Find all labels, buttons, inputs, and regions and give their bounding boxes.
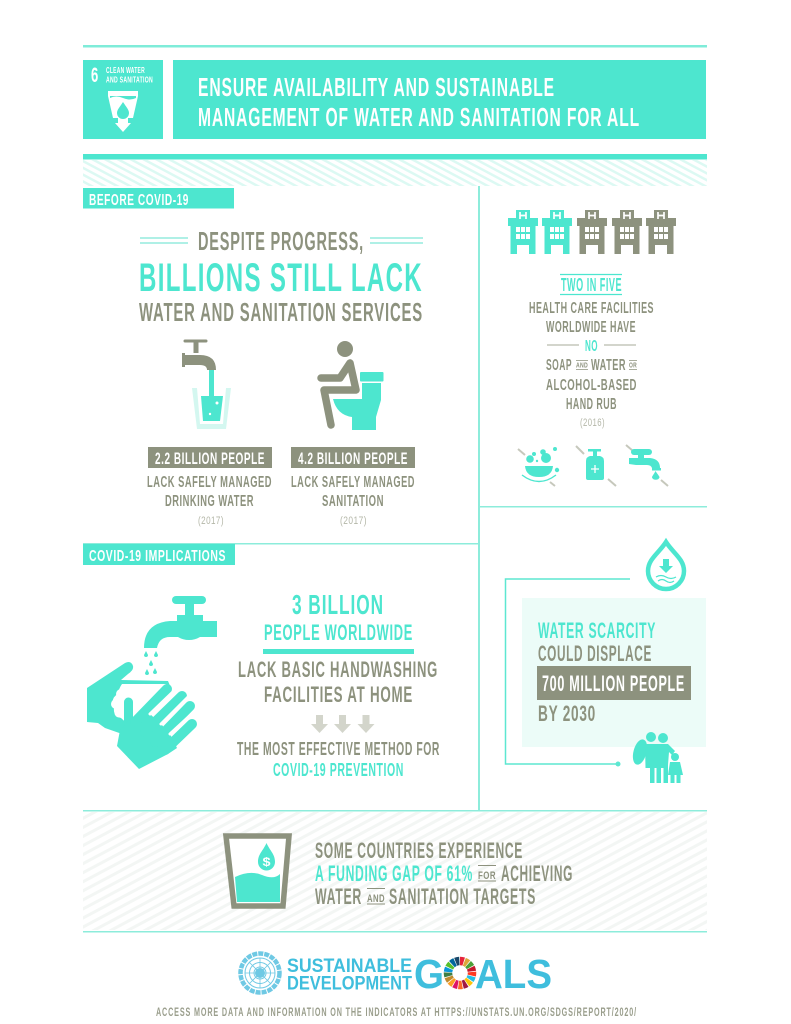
text: funding gap: SANITATION TARGETS bbox=[389, 884, 536, 909]
logo: sustainable development goals: DEVELOPMENT bbox=[287, 974, 412, 994]
text: two in five health care facilities: HAND RUB bbox=[566, 396, 617, 413]
stat: 4.2 billion: LACK SAFELY MANAGED bbox=[291, 474, 415, 491]
icons: crossed out soap, sanitizer and tap bbox=[518, 445, 668, 486]
logo: sustainable development goals: G bbox=[414, 951, 444, 997]
logo: sustainable development goals: SUSTAINABLE bbox=[287, 956, 412, 977]
text: 3 billion lack handwashing: THE MOST EFFECTIVE METHOD FOR bbox=[237, 739, 440, 759]
stat: 2.2 billion bbox=[147, 447, 272, 527]
sdg 6 badge: 6 bbox=[91, 64, 99, 87]
text: funding gap: A FUNDING GAP OF 61% bbox=[315, 861, 473, 886]
panel: water scarcity: BY 2030 bbox=[538, 701, 596, 726]
sdg 6 badge: AND SANITATION bbox=[106, 76, 153, 84]
heading: billions still lack: WATER AND SANITATION SERVICES bbox=[139, 297, 423, 327]
text: funding gap bbox=[315, 838, 573, 909]
text: two in five health care facilities: (2016) bbox=[580, 417, 605, 429]
heading: billions still lack: DESPITE PROGRESS, bbox=[198, 226, 364, 256]
heading: billions still lack: BILLIONS STILL LACK bbox=[139, 256, 423, 300]
icon: glass with dollar drop bbox=[226, 836, 289, 906]
icon: person on toilet bbox=[321, 341, 384, 430]
panel: water scarcity: COULD DISPLACE bbox=[538, 641, 652, 666]
stat: 4.2 billion: (2017) bbox=[340, 515, 367, 527]
stat: 2.2 billion: LACK SAFELY MANAGED bbox=[147, 474, 272, 491]
text: funding gap: FOR bbox=[478, 870, 496, 882]
icon: water drop with arrow bbox=[648, 542, 684, 589]
text: funding gap: SOME COUNTRIES EXPERIENCE bbox=[315, 838, 523, 863]
text: two in five health care facilities: SOAP bbox=[546, 357, 572, 374]
text: two in five health care facilities: WORLDWIDE HAVE bbox=[546, 319, 636, 336]
text: 3 billion lack handwashing: 3 BILLION bbox=[292, 589, 384, 620]
text: funding gap: AND bbox=[367, 893, 385, 905]
text: two in five health care facilities: AND bbox=[576, 362, 588, 370]
text: two in five health care facilities: WATER bbox=[591, 357, 626, 374]
text: two in five health care facilities: TWO IN FIVE bbox=[561, 275, 622, 295]
text: funding gap: ACHIEVING bbox=[501, 861, 573, 886]
icon: washing hands under tap bbox=[87, 596, 217, 769]
sdg 6 badge bbox=[83, 60, 163, 139]
text: funding gap: WATER bbox=[315, 884, 362, 909]
text: two in five health care facilities: NO bbox=[585, 338, 598, 355]
stat: 2.2 billion: DRINKING WATER bbox=[165, 493, 254, 510]
text: two in five health care facilities: ALCOHOL-BASED bbox=[546, 377, 637, 394]
stat: 2.2 billion: 2.2 BILLION PEOPLE bbox=[155, 449, 265, 468]
heading: billions still lack bbox=[139, 226, 423, 327]
text: two in five health care facilities: OR bbox=[629, 362, 637, 370]
text: 3 billion lack handwashing: COVID-19 PREVENTION bbox=[273, 760, 404, 780]
panel: water scarcity bbox=[522, 598, 706, 747]
text: two in five health care facilities: HEALTH CARE FACILITIES bbox=[529, 300, 654, 317]
text: 3 billion lack handwashing bbox=[237, 589, 440, 780]
stat: 4.2 billion: 4.2 BILLION PEOPLE bbox=[298, 449, 408, 468]
text: 3 billion lack handwashing: LACK BASIC HANDWASHING bbox=[238, 657, 438, 682]
icon: family bbox=[630, 732, 683, 783]
logo: sustainable development goals: ALS bbox=[475, 951, 552, 997]
sdg 6 badge: CLEAN WATER bbox=[106, 66, 145, 75]
icon: glass with dollar drop: $ bbox=[262, 855, 271, 869]
logo: sustainable development goals bbox=[287, 951, 552, 997]
text: 3 billion lack handwashing: PEOPLE WORLDWIDE bbox=[264, 620, 413, 645]
text: two in five health care facilities bbox=[529, 274, 654, 429]
panel: water scarcity: 700 MILLION PEOPLE bbox=[542, 671, 685, 696]
title banner bbox=[173, 60, 706, 139]
stat: 2.2 billion: (2017) bbox=[198, 515, 224, 527]
connector line bbox=[506, 579, 630, 764]
logo: united nations emblem bbox=[240, 954, 280, 992]
section tag: before covid-19: BEFORE COVID-19 bbox=[89, 192, 189, 209]
section tag: covid-19 implications: COVID-19 IMPLICATIONS bbox=[89, 548, 226, 565]
stat: 4.2 billion bbox=[291, 447, 415, 527]
stat: 4.2 billion: SANITATION bbox=[322, 493, 384, 510]
section tag: covid-19 implications bbox=[83, 544, 235, 565]
icon: tap filling glass bbox=[182, 341, 231, 429]
title banner: ENSURE AVAILABILITY AND SUSTAINABLE bbox=[198, 72, 555, 102]
panel: water scarcity: WATER SCARCITY bbox=[538, 618, 656, 643]
text: 3 billion lack handwashing: FACILITIES AT HOME bbox=[264, 682, 413, 707]
icon: five hospitals bbox=[508, 210, 676, 254]
